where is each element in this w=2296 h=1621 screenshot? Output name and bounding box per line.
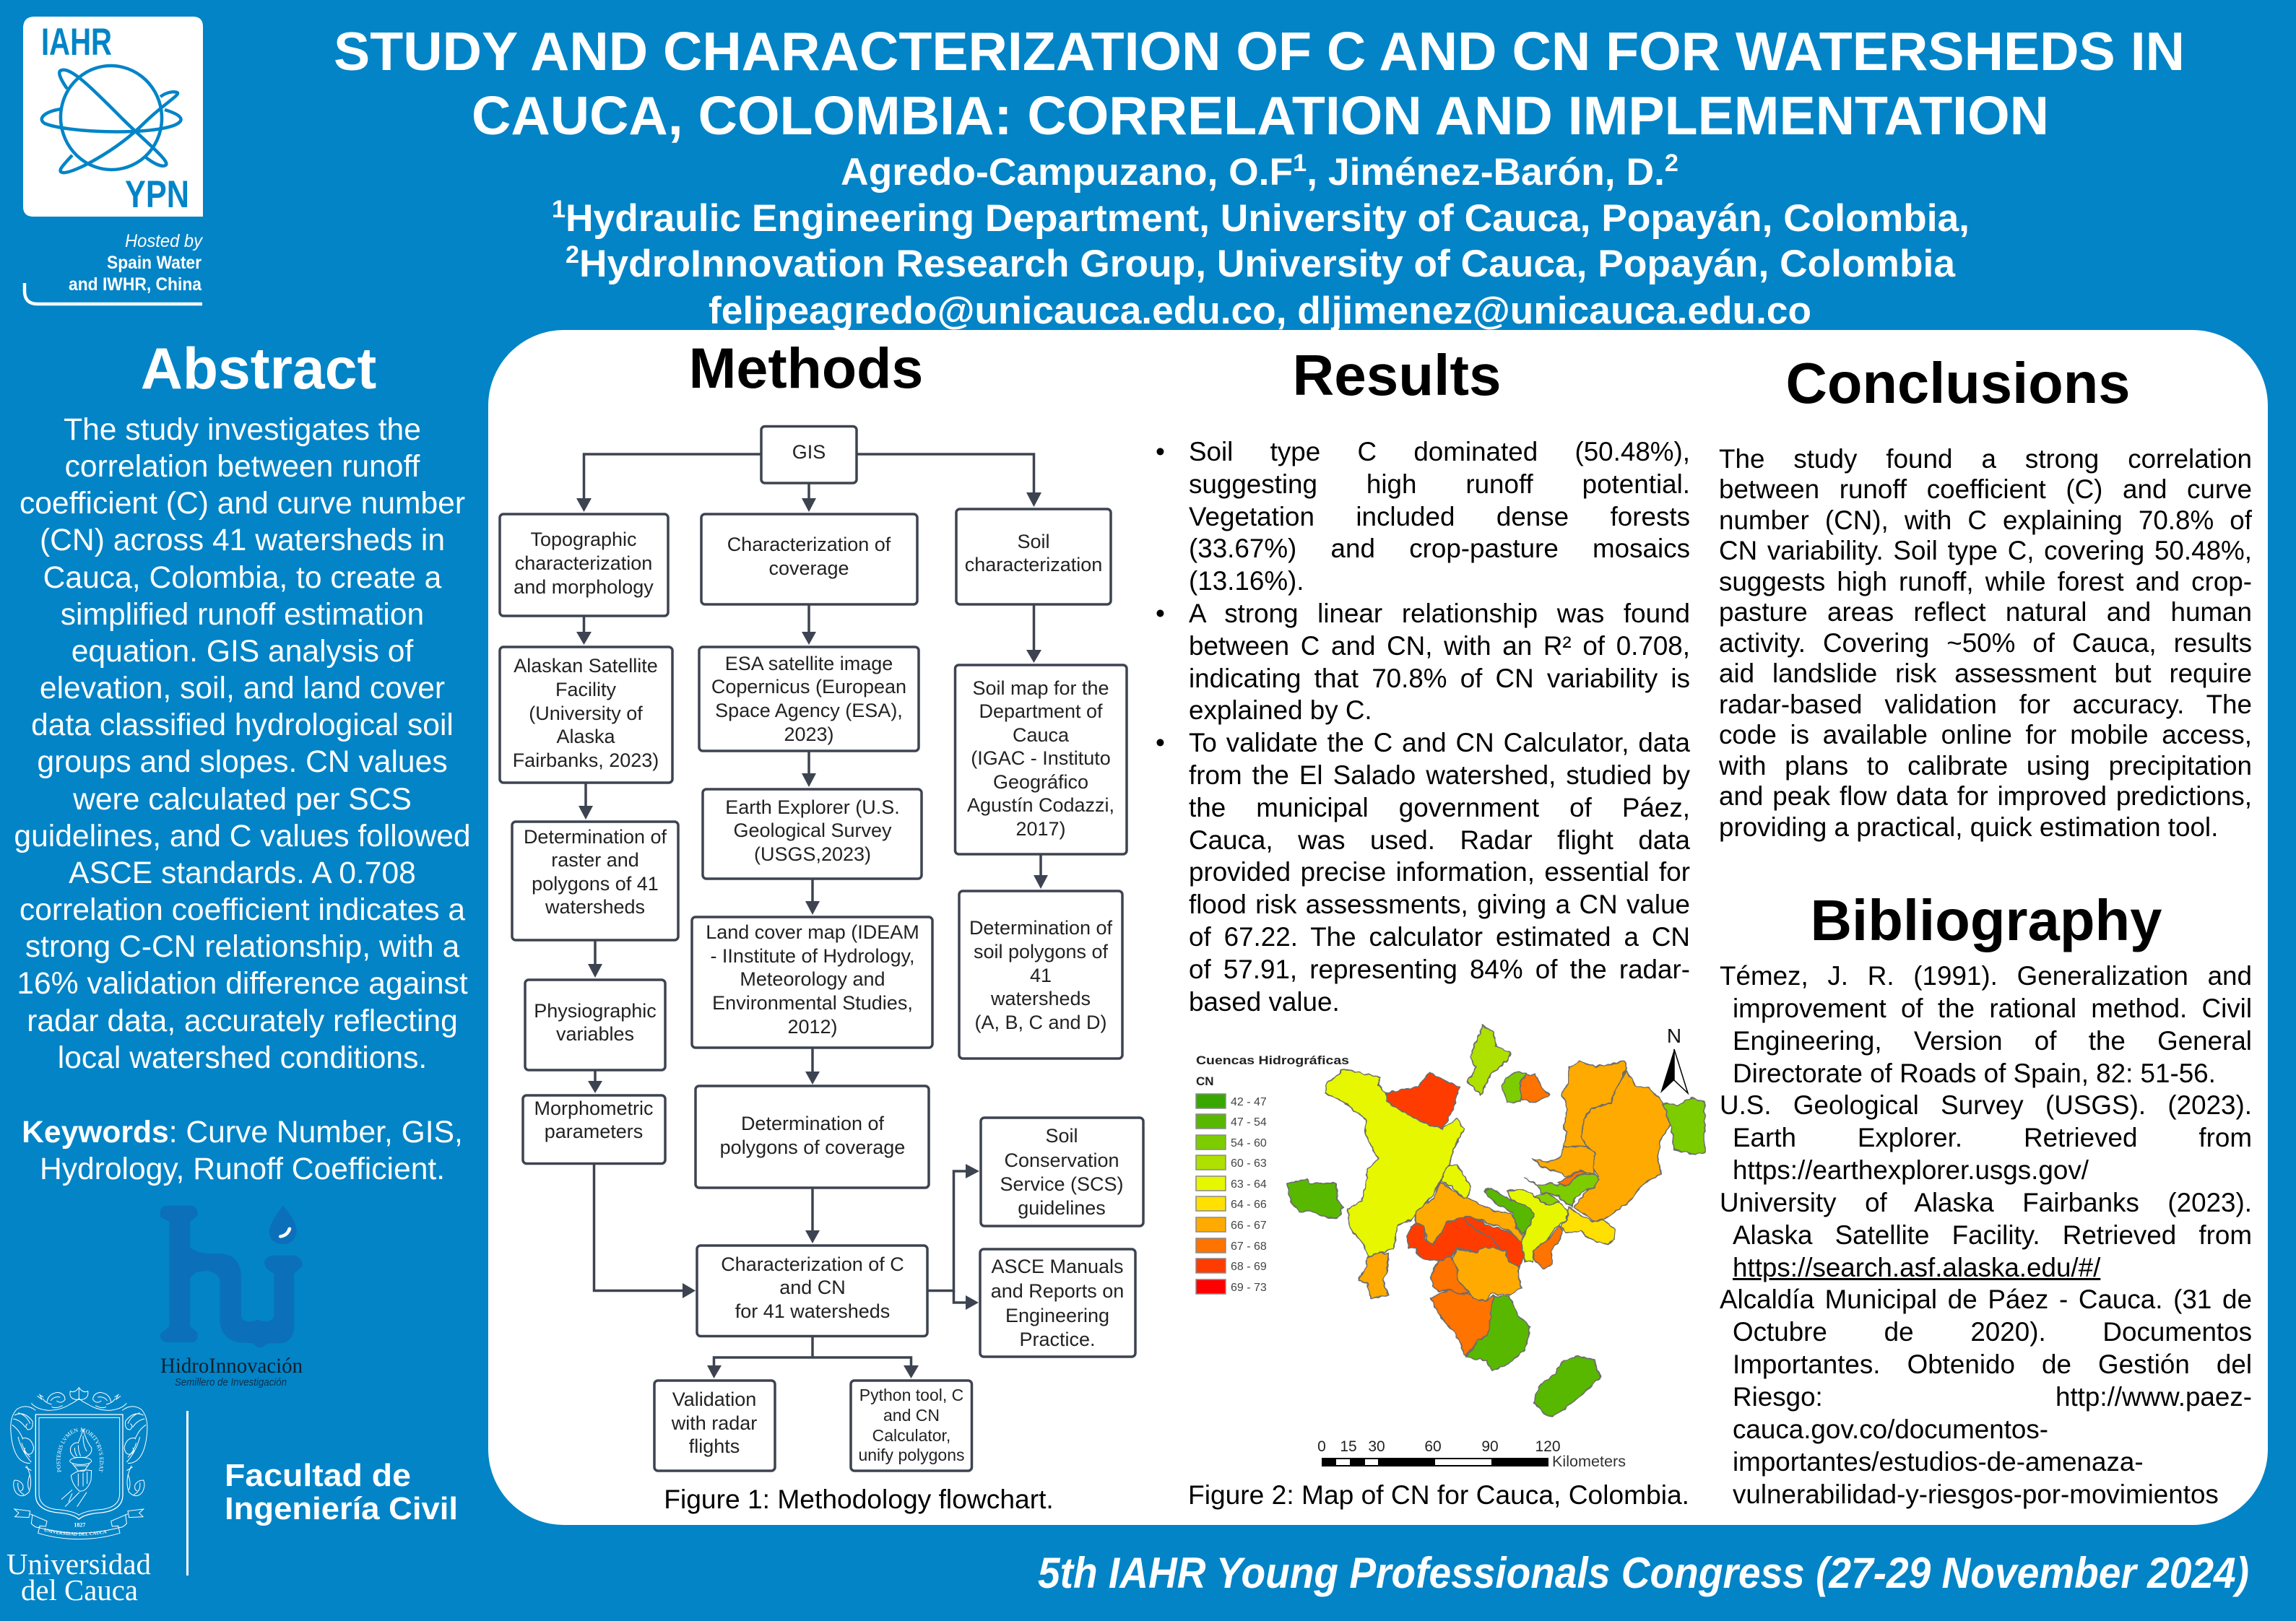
abstract text: correlation coefficient indicates a bbox=[20, 892, 465, 927]
box: land cover map: - IInstitute of Hydrology, bbox=[710, 945, 915, 967]
map legend: 67 - 68 bbox=[1231, 1240, 1267, 1253]
hosted by text bbox=[69, 231, 203, 295]
arrow: C and CN to ASCE manuals bbox=[953, 1291, 979, 1310]
results text: A strong linear relationship was found bbox=[1189, 599, 1690, 628]
box: soil map: Soil map for the bbox=[972, 677, 1109, 699]
authors and affiliations: 2 bbox=[1665, 149, 1678, 177]
box: physiographic variables bbox=[525, 980, 665, 1070]
abstract text: elevation, soil, and land cover bbox=[40, 671, 445, 705]
box: soil characterization: characterization bbox=[965, 554, 1102, 575]
box: ESA satellite image: 2023) bbox=[784, 723, 834, 745]
logo: Universidad del Cauca crest: UNIVERSIDAD DEL CAUCA bbox=[45, 1528, 107, 1536]
conclusions text: between runoff coefficient (C) and curve bbox=[1719, 474, 2252, 504]
bibliography text: Octubre de 2020). Documentos bbox=[1733, 1317, 2252, 1347]
logo: Universidad del Cauca crest bbox=[7, 1386, 151, 1607]
box: C and CN characterization: Characterization of C bbox=[721, 1253, 904, 1275]
results text: Soil type C dominated (50.48%), bbox=[1189, 437, 1690, 466]
box: soil polygons: Determination of bbox=[969, 917, 1113, 939]
text: • bbox=[1156, 437, 1165, 466]
bibliography text: importantes/estudios-de-amenaza- bbox=[1733, 1447, 2144, 1477]
heading: results: Results bbox=[1293, 343, 1501, 407]
box: topographic characterization: characterization bbox=[515, 552, 652, 574]
abstract text: were calculated per SCS bbox=[73, 782, 412, 817]
box: SCS guidelines: Conservation bbox=[1004, 1150, 1119, 1171]
bibliography text: Directorate of Roads of Spain, 82: 51-56. bbox=[1733, 1059, 2216, 1088]
box: soil polygons: soil polygons of bbox=[974, 941, 1109, 962]
abstract text: data classified hydrological soil bbox=[31, 708, 454, 742]
arrow: morphometric to C and CN bbox=[594, 1163, 696, 1298]
box: raster and polygons: watersheds bbox=[545, 896, 645, 918]
box: soil polygons bbox=[959, 891, 1122, 1059]
logo: Universidad del Cauca crest: del Cauca bbox=[21, 1573, 138, 1607]
box: python tool: Python tool, C bbox=[859, 1386, 963, 1404]
box: ESA satellite image: ESA satellite image bbox=[725, 653, 893, 674]
box: raster and polygons: Determination of bbox=[524, 826, 667, 848]
box: topographic characterization: and morphology bbox=[514, 576, 654, 598]
authors and affiliations: , Jiménez-Barón, D. bbox=[1307, 151, 1665, 194]
bibliography text: Témez, J. R. (1991). Generalization and bbox=[1720, 961, 2252, 991]
bibliography text: University of Alaska Fairbanks (2023). bbox=[1720, 1188, 2252, 1217]
map polygons bbox=[1287, 1025, 1704, 1417]
box: polygons of coverage bbox=[696, 1086, 929, 1188]
authors and affiliations bbox=[552, 149, 1970, 332]
results text: between C and CN, with an R² of 0.708, bbox=[1189, 631, 1690, 661]
box: soil polygons: 41 bbox=[1030, 965, 1052, 986]
arrow: GIS to soil bbox=[857, 454, 1041, 507]
logo: HidroInnovacion: HidroInnovación bbox=[160, 1354, 303, 1378]
abstract text: Cauca, Colombia, to create a bbox=[43, 560, 441, 595]
logo: Universidad del Cauca crest: POSTERIS LVMEN MORITVRVS EDAT bbox=[56, 1427, 104, 1473]
conclusions text: radar-based validation for accuracy. The bbox=[1719, 689, 2252, 719]
arrow: Alaskan to raster bbox=[579, 783, 593, 820]
scale bar: 0 bbox=[1317, 1438, 1326, 1455]
scale bar: Kilometers bbox=[1552, 1453, 1626, 1470]
box: soil map: Cauca bbox=[1013, 724, 1070, 746]
box: Alaskan Satellite Facility: Fairbanks, 2023) bbox=[513, 749, 659, 771]
map legend: 68 - 69 bbox=[1231, 1261, 1267, 1273]
box: ESA satellite image bbox=[699, 647, 919, 751]
box: land cover map: Land cover map (IDEAM bbox=[706, 921, 919, 943]
logo: HidroInnovacion bbox=[160, 1206, 303, 1389]
box: C and CN characterization: for 41 watersheds bbox=[735, 1300, 890, 1322]
abstract text: simplified runoff estimation bbox=[61, 597, 424, 632]
text: • bbox=[1156, 599, 1165, 628]
faculty name bbox=[225, 1458, 458, 1526]
bibliography text: U.S. Geological Survey (USGS). (2023). bbox=[1720, 1090, 2252, 1120]
results text: To validate the C and CN Calculator, data bbox=[1189, 728, 1690, 757]
conclusions text: providing a practical, quick estimation tool. bbox=[1719, 812, 2218, 842]
bibliography text: Engineering, Version of the General bbox=[1733, 1026, 2252, 1056]
box: land cover map: 2012) bbox=[787, 1016, 838, 1038]
abstract text: radar data, accurately reflecting bbox=[27, 1004, 458, 1038]
box: raster and polygons: raster and bbox=[551, 849, 639, 871]
box: soil map: Geográfico bbox=[993, 771, 1088, 793]
abstract text: local watershed conditions. bbox=[58, 1040, 427, 1075]
flowchart: methodology bbox=[500, 426, 1143, 1471]
box: ASCE manuals bbox=[980, 1249, 1135, 1357]
text: • bbox=[1156, 728, 1165, 757]
box: Earth Explorer: (USGS,2023) bbox=[754, 843, 871, 865]
abstract text: (CN) across 41 watersheds in bbox=[40, 523, 445, 557]
bibliography text: improvement of the rational method. Civil bbox=[1733, 994, 2252, 1023]
map legend bbox=[1196, 1053, 1349, 1294]
heading: bibliography: Bibliography bbox=[1810, 888, 2162, 952]
heading: conclusions: Conclusions bbox=[1785, 351, 2131, 415]
abstract text: equation. GIS analysis of bbox=[72, 634, 413, 669]
conclusions text: pasture areas reflect natural and human bbox=[1719, 597, 2252, 627]
conclusions text: activity. Covering ~50% of Cauca, results bbox=[1719, 628, 2252, 657]
bibliography text: vulnerabilidad-y-riesgos-por-movimientos bbox=[1733, 1479, 2219, 1509]
keywords: Hydrology, Runoff Coefficient. bbox=[40, 1151, 445, 1186]
logo: Universidad del Cauca crest: Universidad bbox=[7, 1547, 151, 1581]
hosted by text: and IWHR, China bbox=[69, 274, 202, 295]
north arrow bbox=[1660, 1025, 1688, 1093]
abstract text: groups and slopes. CN values bbox=[37, 744, 448, 779]
box: SCS guidelines: Soil bbox=[1045, 1125, 1078, 1147]
abstract text: coefficient (C) and curve number bbox=[20, 486, 465, 521]
abstract text: correlation between runoff bbox=[65, 449, 420, 484]
arrow: topographic to Alaskan bbox=[576, 616, 592, 645]
results text: from the El Salado watershed, studied by bbox=[1189, 760, 1690, 790]
arrow: physiographic to morphometric bbox=[588, 1070, 602, 1093]
logo: IAHR YPN bbox=[23, 17, 203, 217]
conclusions text: suggests high runoff, while forest and crop- bbox=[1719, 566, 2252, 596]
box: Earth Explorer bbox=[703, 789, 922, 879]
figure 2 caption: Figure 2: Map of CN for Cauca, Colombia. bbox=[1188, 1480, 1689, 1510]
box: C and CN characterization: and CN bbox=[779, 1277, 846, 1298]
authors and affiliations: 1 bbox=[1293, 149, 1307, 177]
arrow: soil to soil map bbox=[1026, 604, 1041, 663]
box: physiographic variables: variables bbox=[556, 1023, 634, 1045]
box: Alaskan Satellite Facility bbox=[500, 647, 672, 783]
scale bar: 90 bbox=[1481, 1438, 1499, 1455]
conclusions text bbox=[1719, 443, 2252, 842]
faculty name: Facultad de bbox=[225, 1458, 411, 1493]
map legend: 63 - 64 bbox=[1231, 1178, 1267, 1191]
results text: of 67.22. The calculator estimated a CN bbox=[1189, 922, 1690, 952]
abstract text: guidelines, and C values followed bbox=[14, 819, 471, 853]
box: polygons of coverage: polygons of coverage bbox=[720, 1137, 905, 1158]
results text: suggesting high runoff potential. bbox=[1189, 469, 1690, 499]
results text: of 57.91, representing 84% of the radar- bbox=[1189, 955, 1690, 984]
box: ASCE manuals: and Reports on bbox=[991, 1280, 1124, 1302]
box: GIS bbox=[761, 426, 857, 483]
faculty divider bbox=[186, 1411, 189, 1576]
authors and affiliations: HydroInnovation Research Group, University of Cauca, Popayán, Colombia bbox=[579, 243, 1956, 285]
results text: Cauca, was used. Radar flight data bbox=[1189, 825, 1690, 855]
box: Earth Explorer: Earth Explorer (U.S. bbox=[725, 796, 900, 818]
figure 1 caption: Figure 1: Methodology flowchart. bbox=[664, 1484, 1054, 1514]
conclusions text: CN variability. Soil type C, covering 50.48%, bbox=[1719, 536, 2252, 565]
map legend: 66 - 67 bbox=[1231, 1220, 1267, 1232]
box: morphometric parameters: Morphometric bbox=[534, 1098, 654, 1119]
results text: the municipal government of Páez, bbox=[1189, 793, 1690, 822]
authors and affiliations: Hydraulic Engineering Department, University of Cauca, Popayán, Colombia, bbox=[566, 197, 1970, 240]
box: polygons of coverage: Determination of bbox=[741, 1113, 885, 1134]
conclusions text: The study found a strong correlation bbox=[1719, 443, 2252, 474]
conclusions text: and peak flow data for improved predictions, bbox=[1719, 781, 2252, 811]
authors and affiliations: 2 bbox=[566, 241, 579, 269]
arrow: ESA to Earth Explorer bbox=[802, 751, 816, 787]
abstract text: strong C-CN relationship, with a bbox=[25, 929, 459, 964]
arrow: Earth Explorer to land cover bbox=[805, 879, 820, 915]
results text: flood risk assessments, giving a CN value bbox=[1189, 890, 1690, 919]
bibliography text: Alaska Satellite Facility. Retrieved from bbox=[1733, 1220, 2252, 1250]
box: ASCE manuals: Engineering bbox=[1005, 1305, 1109, 1326]
bibliography text: cauca.gov.co/documentos- bbox=[1733, 1414, 2048, 1444]
abstract text: ASCE standards. A 0.708 bbox=[69, 856, 416, 890]
bibliography text: Importantes. Obtenido de Gestión del bbox=[1733, 1350, 2252, 1379]
box: soil map: Agustín Codazzi, bbox=[967, 794, 1114, 816]
results text: provided precise information, essential for bbox=[1189, 857, 1690, 887]
box: SCS guidelines: Service (SCS) bbox=[1000, 1173, 1124, 1195]
logo: IAHR YPN: IAHR bbox=[41, 21, 112, 64]
box: python tool: and CN bbox=[883, 1406, 940, 1425]
box: GIS: GIS bbox=[792, 441, 826, 463]
box: SCS guidelines bbox=[981, 1118, 1143, 1226]
keywords bbox=[22, 1115, 463, 1186]
box: characterization of coverage: Characterization of bbox=[727, 534, 891, 555]
scale bar: 120 bbox=[1535, 1438, 1561, 1455]
box: validation: with radar bbox=[671, 1412, 757, 1434]
results text: (33.67%) and crop-pasture mosaics bbox=[1189, 534, 1690, 563]
box: land cover map: Environmental Studies, bbox=[712, 992, 913, 1014]
title: STUDY AND CHARACTERIZATION OF C AND CN FOR WATERSHEDS IN bbox=[334, 21, 2185, 82]
arrow: land cover to coverage polygons bbox=[805, 1048, 820, 1085]
authors and affiliations: Agredo-Campuzano, O.F bbox=[841, 151, 1289, 194]
heading: abstract: Abstract bbox=[141, 336, 376, 401]
map legend: 60 - 63 bbox=[1231, 1157, 1267, 1170]
box: Alaskan Satellite Facility: Facility bbox=[555, 679, 616, 700]
hosted by text: Hosted by bbox=[125, 231, 203, 251]
box: soil characterization bbox=[956, 509, 1111, 604]
title: CAUCA, COLOMBIA: CORRELATION AND IMPLEMENTATION bbox=[472, 85, 2049, 146]
map legend: 54 - 60 bbox=[1231, 1137, 1267, 1150]
arrow: C and CN to SCS guidelines bbox=[927, 1164, 979, 1291]
box: python tool: Calculator, bbox=[872, 1426, 950, 1445]
map: CN for Cauca watersheds bbox=[1196, 1025, 1704, 1470]
map legend: 42 - 47 bbox=[1231, 1096, 1267, 1108]
scale bar: 15 bbox=[1340, 1438, 1357, 1455]
box: raster and polygons: polygons of 41 bbox=[532, 873, 659, 895]
box: soil characterization: Soil bbox=[1017, 531, 1050, 552]
north arrow: N bbox=[1667, 1025, 1681, 1047]
scale bar: 30 bbox=[1368, 1438, 1385, 1455]
faculty name: Ingeniería Civil bbox=[225, 1491, 458, 1526]
box: Earth Explorer: Geological Survey bbox=[733, 820, 892, 841]
authors and affiliations: felipeagredo@unicauca.edu.co, dljimenez@unicauca.edu.co bbox=[709, 290, 1811, 332]
results text: based value. bbox=[1189, 987, 1340, 1017]
box: morphometric parameters: parameters bbox=[545, 1121, 643, 1142]
results text bbox=[1156, 437, 1690, 1017]
box: topographic characterization: Topographic bbox=[530, 529, 637, 550]
box: topographic characterization bbox=[500, 514, 668, 616]
box: soil map: Department of bbox=[979, 700, 1103, 722]
box: python tool: unify polygons bbox=[858, 1446, 965, 1464]
box: Alaskan Satellite Facility: Alaska bbox=[556, 726, 615, 747]
bibliography text bbox=[1720, 961, 2252, 1509]
box: characterization of coverage: coverage bbox=[768, 557, 849, 579]
conclusions text: aid landslide risk assessment but require bbox=[1719, 659, 2252, 688]
logo: IAHR YPN: YPN bbox=[125, 173, 189, 216]
map legend: 47 - 54 bbox=[1231, 1116, 1267, 1129]
box: validation: flights bbox=[689, 1435, 740, 1457]
box: ESA satellite image: Copernicus (European bbox=[711, 676, 906, 697]
logo: Universidad del Cauca crest: 1827 bbox=[74, 1522, 85, 1529]
title bbox=[334, 21, 2185, 146]
arrow: raster to physiographic bbox=[588, 940, 602, 978]
abstract text: The study investigates the bbox=[64, 412, 421, 447]
box: morphometric parameters bbox=[523, 1095, 665, 1164]
box: ESA satellite image: Space Agency (ESA), bbox=[715, 700, 903, 721]
box: python tool bbox=[851, 1381, 972, 1471]
box: Alaskan Satellite Facility: Alaskan Satellite bbox=[514, 655, 658, 677]
box: physiographic variables: Physiographic bbox=[534, 1000, 657, 1022]
heading: methods: Methods bbox=[689, 336, 923, 400]
bibliography text: Riesgo: http://www.paez- bbox=[1733, 1382, 2252, 1412]
box: characterization of coverage bbox=[701, 514, 917, 604]
box: ASCE manuals: Practice. bbox=[1019, 1329, 1096, 1350]
arrow: soil map to soil polygons bbox=[1034, 854, 1048, 889]
box: ASCE manuals: ASCE Manuals bbox=[991, 1256, 1124, 1277]
logo: HidroInnovacion: Semillero de Investigación bbox=[175, 1376, 287, 1389]
arrow: GIS to coverage bbox=[802, 483, 816, 512]
box: SCS guidelines: guidelines bbox=[1018, 1197, 1106, 1219]
box: soil map: (IGAC - Instituto bbox=[971, 747, 1111, 769]
results text: Vegetation included dense forests bbox=[1189, 502, 1690, 531]
map legend: Cuencas Hidrográficas bbox=[1196, 1053, 1349, 1067]
white content panel bbox=[488, 330, 2268, 1525]
box: C and CN characterization bbox=[697, 1246, 927, 1336]
box: soil polygons: (A, B, C and D) bbox=[974, 1012, 1107, 1033]
results text: indicating that 70.8% of CN variability is bbox=[1189, 664, 1690, 693]
box: land cover map: Meteorology and bbox=[740, 968, 885, 990]
conclusions text: with plans to calibrate using precipitation bbox=[1719, 751, 2252, 780]
bibliography text: Earth Explorer. Retrieved from bbox=[1733, 1123, 2252, 1152]
abstract text bbox=[14, 412, 471, 1075]
conclusions text: code is available online for mobile access, bbox=[1719, 720, 2252, 749]
arrow: GIS to topographic bbox=[576, 454, 761, 512]
conclusions text: number (CN), with C explaining 70.8% of bbox=[1719, 505, 2252, 534]
arrow: coverage polygons to C and CN bbox=[805, 1188, 820, 1243]
box: land cover map bbox=[692, 917, 932, 1048]
hosted bracket bbox=[25, 283, 202, 304]
box: validation bbox=[654, 1381, 775, 1471]
map legend: 69 - 73 bbox=[1231, 1282, 1267, 1294]
keywords: Keywords: Curve Number, GIS, bbox=[22, 1115, 463, 1150]
arrow: C and CN to validation and tool bbox=[707, 1337, 919, 1378]
box: soil polygons: watersheds bbox=[990, 988, 1091, 1009]
abstract text: 16% validation difference against bbox=[17, 966, 468, 1001]
bibliography text: https://search.asf.alaska.edu/#/ bbox=[1733, 1253, 2100, 1282]
hosted by text: Spain Water bbox=[107, 253, 202, 273]
results text: explained by C. bbox=[1189, 695, 1372, 725]
bibliography text: https://earthexplorer.usgs.gov/ bbox=[1733, 1155, 2089, 1185]
results text: (13.16%). bbox=[1189, 566, 1304, 596]
authors and affiliations: 1 bbox=[552, 196, 566, 223]
box: raster and polygons bbox=[512, 822, 678, 940]
arrow: coverage to ESA bbox=[802, 604, 816, 645]
box: validation: Validation bbox=[672, 1389, 756, 1410]
box: soil map bbox=[955, 665, 1127, 854]
scale bar bbox=[1317, 1438, 1626, 1470]
scale bar: 60 bbox=[1424, 1438, 1442, 1455]
box: Alaskan Satellite Facility: (University of bbox=[529, 703, 643, 724]
map legend: CN bbox=[1196, 1074, 1214, 1088]
box: soil map: 2017) bbox=[1015, 818, 1066, 840]
bibliography text: Alcaldía Municipal de Páez - Cauca. (31 de bbox=[1720, 1285, 2252, 1314]
map legend: 64 - 66 bbox=[1231, 1199, 1267, 1211]
